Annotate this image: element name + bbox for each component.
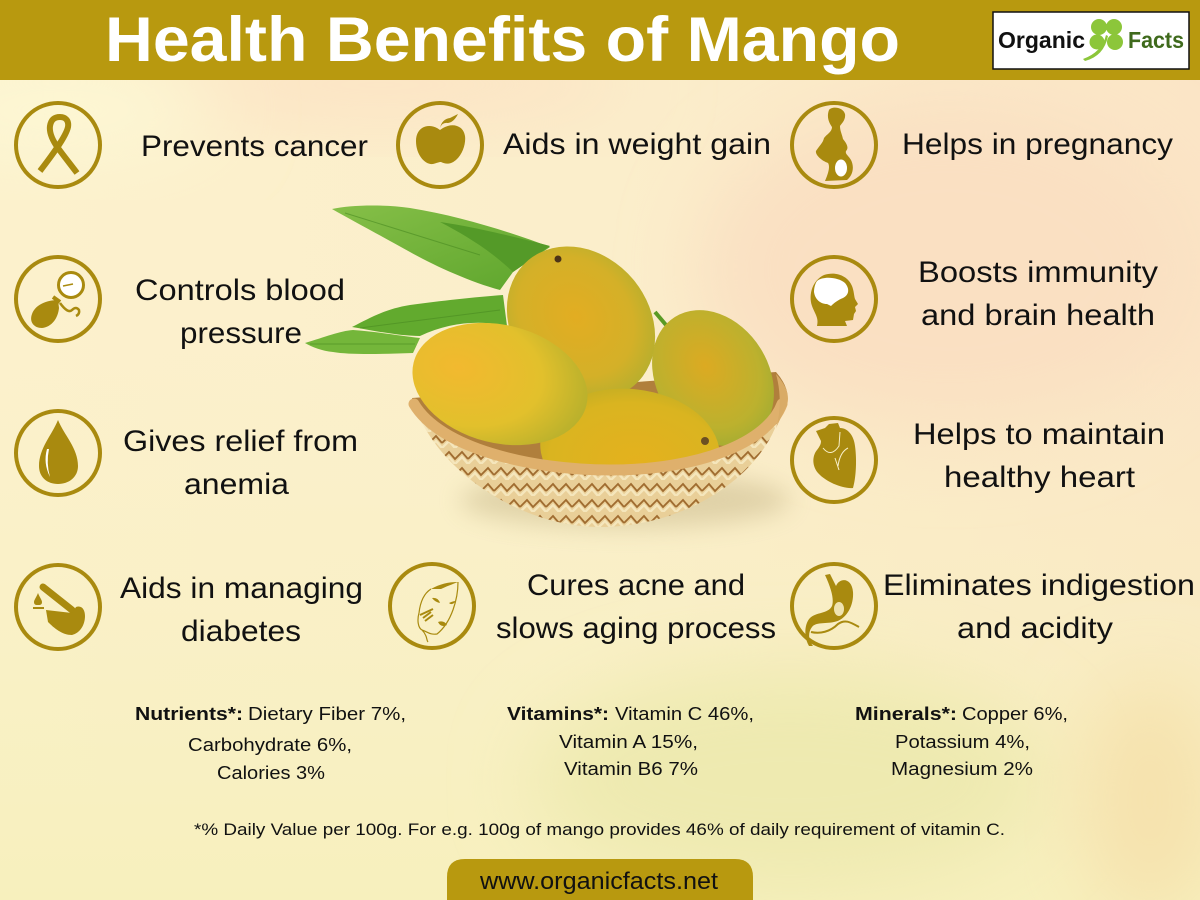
- benefit: indigestion: and acidity: [957, 612, 1113, 645]
- icon: apple: [398, 103, 482, 187]
- vitamins text: Vitamin A 15%,: [559, 732, 698, 752]
- website pill: www.organicfacts.net: [479, 868, 718, 895]
- icon: head with brain: [792, 257, 876, 341]
- benefit: indigestion: [883, 569, 1195, 645]
- icon: awareness ribbon: [16, 103, 100, 187]
- minerals text: Potassium 4%,: [895, 732, 1030, 752]
- benefit: indigestion: Eliminates indigestion: [883, 569, 1195, 602]
- basket rim: [414, 404, 782, 470]
- basket inside: [412, 372, 788, 470]
- benefit: blood pressure: [135, 274, 345, 350]
- benefit: weight gain: Aids in weight gain: [503, 128, 771, 161]
- benefit: diabetes: Aids in managing: [120, 572, 363, 605]
- benefit: blood pressure: pressure: [180, 317, 302, 350]
- logo: Organic Facts: [993, 12, 1189, 69]
- icon: stomach: [792, 564, 876, 648]
- icon: woman's face: [390, 564, 474, 648]
- benefit: anemia: anemia: [184, 468, 289, 501]
- icon: blood drop: [16, 411, 100, 495]
- icon: finger prick: [16, 565, 100, 649]
- logo: Organic Facts: Facts: [1128, 27, 1184, 53]
- nutrients text: [135, 704, 406, 783]
- vitamins text: Vitamin B6 7%: [564, 759, 698, 779]
- benefit: prevents cancer: Prevents cancer: [141, 130, 368, 163]
- benefit: anemia: [123, 425, 358, 501]
- icon: blood pressure gauge: [16, 257, 100, 341]
- mangoes: [627, 287, 799, 469]
- nutrients text: Calories 3%: [217, 763, 325, 783]
- logo: Organic Facts: Organic: [998, 27, 1085, 53]
- vitamins text: Vitamin C 46%,: [615, 704, 754, 724]
- nutrients text: Carbohydrate 6%,: [188, 735, 352, 755]
- minerals text: Copper 6%,: [962, 704, 1068, 724]
- footnote: *% Daily Value per 100g. For e.g. 100g of mango provides 46% of daily requirement of vitamin C.: [194, 820, 1005, 839]
- header band: [0, 0, 1200, 80]
- minerals text: Magnesium 2%: [891, 759, 1033, 779]
- benefit: acne and aging: Cures acne and: [527, 569, 745, 602]
- benefit: acne and aging: [496, 569, 776, 645]
- benefit: heart: healthy heart: [944, 461, 1136, 494]
- benefit: acne and aging: slows aging process: [496, 612, 776, 645]
- nutrients text: Dietary Fiber 7%,: [248, 704, 406, 724]
- leaves: [305, 205, 550, 354]
- benefit: heart: [913, 418, 1165, 494]
- vitamins text: [507, 704, 754, 779]
- vitamins text: Vitamins*:: [507, 704, 609, 724]
- benefit: blood pressure: Controls blood: [135, 274, 345, 307]
- icon: clover: [1083, 19, 1123, 61]
- icon: pregnant woman: [792, 103, 876, 187]
- benefit: diabetes: [120, 572, 363, 648]
- basket body: [414, 404, 782, 527]
- minerals text: [855, 704, 1068, 779]
- mango basket illustration: [305, 205, 799, 528]
- benefit: diabetes: diabetes: [181, 615, 301, 648]
- benefit: pregnancy: Helps in pregnancy: [902, 128, 1173, 161]
- benefit: immunity and brain: and brain health: [921, 299, 1155, 332]
- benefit: anemia: Gives relief from: [123, 425, 358, 458]
- icon: heart: [792, 418, 876, 502]
- nutrients text: Nutrients*:: [135, 704, 243, 724]
- benefit: heart: Helps to maintain: [913, 418, 1165, 451]
- title: Health Benefits of Mango: [105, 5, 900, 75]
- minerals text: Minerals*:: [855, 704, 957, 724]
- benefit: immunity and brain: [918, 256, 1158, 332]
- website pill: [447, 859, 753, 900]
- benefit: immunity and brain: Boosts immunity: [918, 256, 1158, 289]
